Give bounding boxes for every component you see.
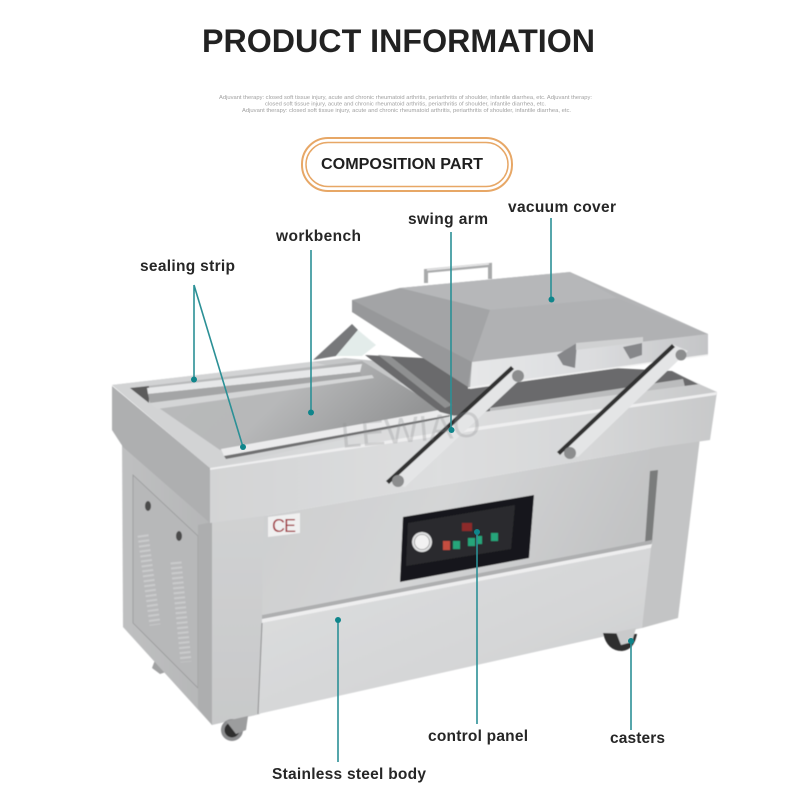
label: casters: casters xyxy=(610,730,665,747)
description text block: closed soft tissue injury, acute and chronic rheumatoid arthritis, periarthritis of shoulder, infantile diarrhea, etc. xyxy=(265,102,546,108)
machine: cover front handle xyxy=(557,337,643,368)
label: sealing strip: sealing strip xyxy=(140,258,235,275)
label: sealing strip xyxy=(140,258,246,450)
description text block: Adjuvant therapy: closed soft tissue injury, acute and chronic rheumatoid arthritis, periarthritis of shoulder, infantile diarrhea, etc. xyxy=(242,108,571,114)
machine: right swing arm xyxy=(557,344,688,459)
label: swing arm: swing arm xyxy=(408,211,488,228)
machine: back sealing strip xyxy=(147,364,374,409)
machine: right front rim xyxy=(210,371,717,523)
machine: back handle xyxy=(426,264,490,283)
title: PRODUCT INFORMATION xyxy=(202,23,595,59)
section heading: composition part: COMPOSITION PART xyxy=(321,156,483,173)
machine: vacuum cover xyxy=(352,272,708,389)
label: control panel xyxy=(428,529,528,745)
machine: front sealing strip xyxy=(221,409,450,459)
machine: left side panel xyxy=(122,440,212,725)
machine: right chamber interior xyxy=(365,355,700,420)
label: stainless steel body: Stainless steel body xyxy=(272,766,426,783)
machine: casters xyxy=(221,628,637,741)
machine: CE mark xyxy=(268,513,300,537)
label: vacuum cover: vacuum cover xyxy=(508,199,616,216)
label: casters xyxy=(610,638,665,747)
label: workbench: workbench xyxy=(275,228,361,245)
machine: right side column xyxy=(642,438,700,628)
description text block: Adjuvant therapy: closed soft tissue injury, acute and chronic rheumatoid arthritis, periarthritis of shoulder, infantile diarrhea, etc. Adjuvant therapy: xyxy=(219,95,592,101)
machine: upper front panel xyxy=(262,447,660,615)
machine: front pillar xyxy=(212,514,266,725)
machine: left swing arm xyxy=(386,366,527,487)
machine: watermark: LEWIAO xyxy=(339,403,482,456)
label: swing arm xyxy=(408,211,488,433)
label: vacuum cover xyxy=(508,199,616,302)
vacuum packaging machine illustration xyxy=(112,264,717,741)
machine: control panel xyxy=(400,495,534,582)
machine: worktop rim xyxy=(112,358,717,468)
machine: lower drawer panel xyxy=(258,548,651,714)
machine: linkage behind cover xyxy=(313,324,376,360)
label: stainless steel body xyxy=(272,617,426,783)
machine: worktop side face xyxy=(112,386,210,523)
section heading: composition part xyxy=(302,138,512,191)
label: control panel: control panel xyxy=(428,728,528,745)
label: workbench xyxy=(275,228,361,416)
machine: chrome strip xyxy=(262,540,652,623)
machine: left vacuum chamber well xyxy=(130,361,446,450)
description text block xyxy=(219,95,592,114)
machine: CE mark: CE xyxy=(272,516,296,536)
